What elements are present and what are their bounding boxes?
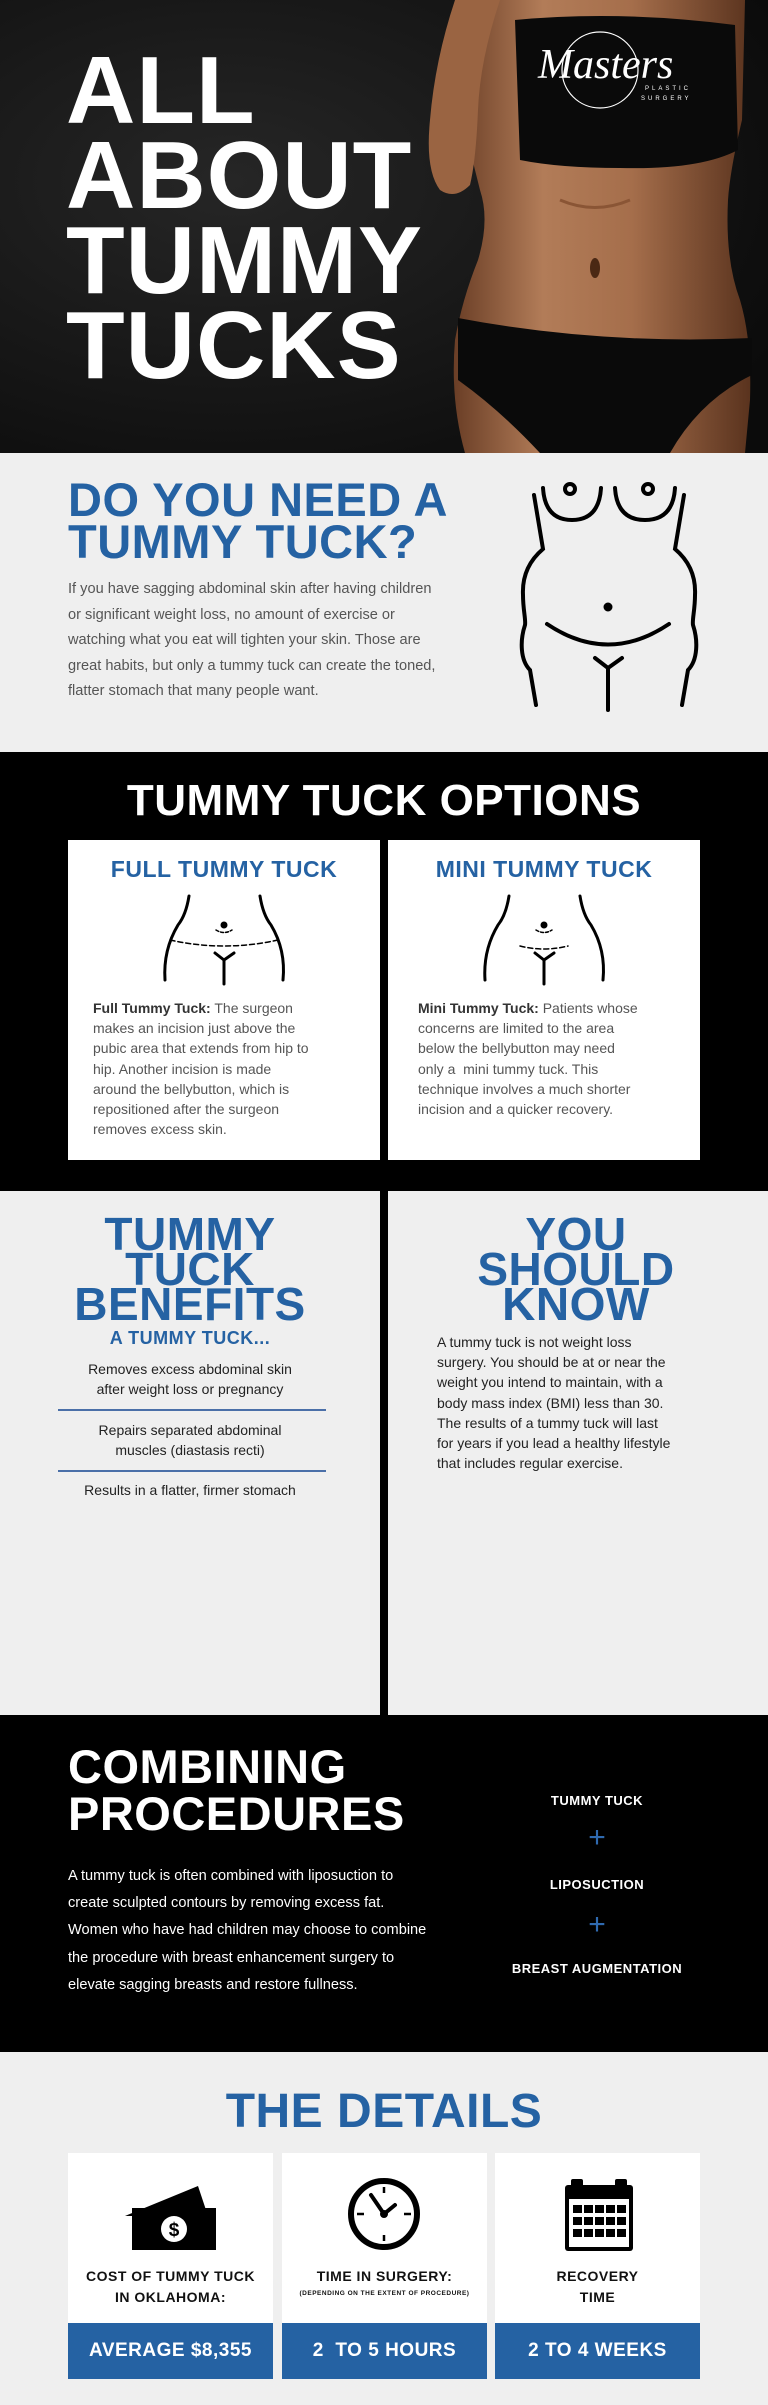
list: procedures bbox=[512, 1793, 682, 1976]
panel: benefits: muscles (diastasis recti) bbox=[115, 1442, 265, 1458]
hero title bbox=[66, 37, 423, 399]
heading: COMBINING bbox=[68, 1740, 347, 1793]
bikini bbox=[458, 318, 752, 453]
card: full: pubic area that extends from hip to bbox=[93, 1040, 309, 1056]
paragraph bbox=[68, 1868, 426, 1993]
list: procedures: + bbox=[588, 1908, 606, 1941]
section: combining bbox=[0, 1715, 768, 2052]
panel: benefits bbox=[58, 1208, 326, 1498]
icon: full incision bbox=[163, 894, 285, 986]
panel: you should know: surgery. You should be at or near the bbox=[437, 1354, 666, 1370]
arm bbox=[429, 0, 500, 194]
section: options bbox=[0, 752, 768, 1191]
card: mini: technique involves a much shorter bbox=[418, 1081, 630, 1097]
section: details bbox=[0, 2052, 768, 2405]
heading: PROCEDURES bbox=[68, 1787, 405, 1840]
card: recovery: TIME bbox=[580, 2289, 615, 2305]
paragraph: elevate sagging breasts and restore fullness. bbox=[68, 1977, 358, 1993]
card: time: (DEPENDING ON THE EXTENT OF PROCEDURE) bbox=[300, 2290, 469, 2297]
paragraph: great habits, but only a tummy tuck can create the toned, bbox=[68, 658, 435, 674]
card: cost: IN OKLAHOMA: bbox=[115, 2289, 226, 2305]
card: full: hip. Another incision is made bbox=[93, 1061, 271, 1077]
card: mini: incision and a quicker recovery. bbox=[418, 1101, 613, 1117]
panel: benefits: TUMMY bbox=[104, 1208, 276, 1260]
panel: you should know: A tummy tuck is not weight loss bbox=[437, 1334, 632, 1350]
logo: PLASTIC bbox=[645, 86, 691, 92]
paragraph: create sculpted contours by removing excess fat. bbox=[68, 1895, 384, 1911]
paragraph: flatter stomach that many people want. bbox=[68, 683, 319, 699]
card: mini: below the bellybutton may need bbox=[418, 1040, 615, 1056]
card: full: Full Tummy Tuck: The surgeon bbox=[93, 1000, 293, 1016]
icon: money bbox=[125, 2186, 216, 2250]
card: full: FULL TUMMY TUCK bbox=[111, 856, 337, 882]
card: mini: Mini Tummy Tuck: Patients whose bbox=[418, 1000, 638, 1016]
panel: you should know: The results of a tummy tuck will last bbox=[437, 1415, 658, 1431]
hero title: TUMMY bbox=[66, 207, 423, 314]
list: procedures: LIPOSUCTION bbox=[550, 1877, 644, 1892]
card: full: around the bellybutton, which is bbox=[93, 1081, 289, 1097]
paragraph: watching what you eat will tighten your skin. Those are bbox=[68, 632, 421, 648]
icon: mini incision bbox=[483, 894, 605, 986]
list: procedures: + bbox=[588, 1821, 606, 1854]
heading bbox=[68, 1740, 405, 1840]
card: recovery: RECOVERY bbox=[556, 2268, 639, 2284]
bra bbox=[515, 16, 738, 168]
panel: you should know: for years if you lead a healthy lifestyle bbox=[437, 1435, 670, 1451]
logo: SURGERY bbox=[641, 96, 692, 102]
card: cost bbox=[68, 2153, 273, 2379]
panel: you should know: body mass index (BMI) less than 30. bbox=[437, 1395, 663, 1411]
list: procedures: BREAST AUGMENTATION bbox=[512, 1961, 682, 1976]
card: mini: concerns are limited to the area bbox=[418, 1020, 614, 1036]
list: procedures: TUMMY TUCK bbox=[551, 1793, 643, 1808]
card: full: makes an incision just above the bbox=[93, 1020, 295, 1036]
card: mini bbox=[388, 840, 700, 1160]
card: mini: only a mini tummy tuck. This bbox=[418, 1061, 598, 1077]
card: full: removes excess skin. bbox=[93, 1121, 227, 1137]
card: time bbox=[282, 2153, 487, 2379]
panel: you should know: weight you intend to maintain, with a bbox=[437, 1374, 663, 1390]
icon: calendar bbox=[565, 2179, 633, 2251]
panel: benefits: Repairs separated abdominal bbox=[99, 1422, 281, 1438]
card: cost: COST OF TUMMY TUCK bbox=[86, 2268, 255, 2284]
logo bbox=[537, 32, 692, 108]
panel: you should know: YOU bbox=[525, 1208, 627, 1260]
section: do you need bbox=[0, 453, 768, 752]
icon: body outline bbox=[520, 482, 698, 712]
card: cost: AVERAGE $8,355 bbox=[89, 2340, 252, 2361]
card: time: 2 TO 5 HOURS bbox=[313, 2340, 456, 2361]
paragraph: If you have sagging abdominal skin after having children bbox=[68, 581, 431, 597]
hero photo: torso bbox=[28, 0, 768, 453]
card: mini: MINI TUMMY TUCK bbox=[436, 856, 652, 882]
panel: benefits: Removes excess abdominal skin bbox=[88, 1361, 292, 1377]
panel: you should know: that includes regular exercise. bbox=[437, 1455, 623, 1471]
hero section bbox=[0, 0, 768, 453]
panel: benefits: BENEFITS bbox=[74, 1278, 306, 1330]
paragraph: Women who have had children may choose to combine bbox=[68, 1922, 426, 1938]
card: full: repositioned after the surgeon bbox=[93, 1101, 279, 1117]
panel: you should know bbox=[437, 1208, 675, 1471]
paragraph: A tummy tuck is often combined with liposuction to bbox=[68, 1868, 393, 1884]
heading: DO YOU NEED A bbox=[68, 473, 448, 526]
paragraph: the procedure with breast enhancement surgery to bbox=[68, 1950, 394, 1966]
card: recovery: 2 TO 4 WEEKS bbox=[528, 2340, 667, 2361]
body bbox=[454, 0, 750, 453]
divider bbox=[380, 1191, 388, 1715]
logo: Masters bbox=[537, 42, 673, 88]
icon: clock bbox=[348, 2178, 420, 2250]
hero title: TUCKS bbox=[66, 292, 402, 399]
paragraph bbox=[68, 581, 435, 699]
heading: TUMMY TUCK? bbox=[68, 515, 417, 568]
paragraph: or significant weight loss, no amount of exercise or bbox=[68, 607, 395, 623]
section: benefits & know bbox=[0, 1191, 768, 1715]
heading: TUMMY TUCK OPTIONS bbox=[127, 776, 641, 825]
panel: benefits: A TUMMY TUCK... bbox=[110, 1328, 270, 1348]
panel: you should know: SHOULD bbox=[477, 1243, 675, 1295]
hero title: ABOUT bbox=[66, 122, 412, 229]
panel: you should know: KNOW bbox=[502, 1278, 650, 1330]
card: recovery bbox=[495, 2153, 700, 2379]
card: time: TIME IN SURGERY: bbox=[317, 2268, 452, 2284]
panel: benefits: Results in a flatter, firmer stomach bbox=[84, 1482, 296, 1498]
heading bbox=[68, 473, 448, 568]
panel: benefits: TUCK bbox=[125, 1243, 255, 1295]
heading: THE DETAILS bbox=[226, 2085, 542, 2138]
hero title: ALL bbox=[66, 37, 256, 144]
card: full bbox=[68, 840, 380, 1160]
panel: benefits: after weight loss or pregnancy bbox=[97, 1381, 283, 1397]
icon: money: $ bbox=[169, 2220, 180, 2241]
